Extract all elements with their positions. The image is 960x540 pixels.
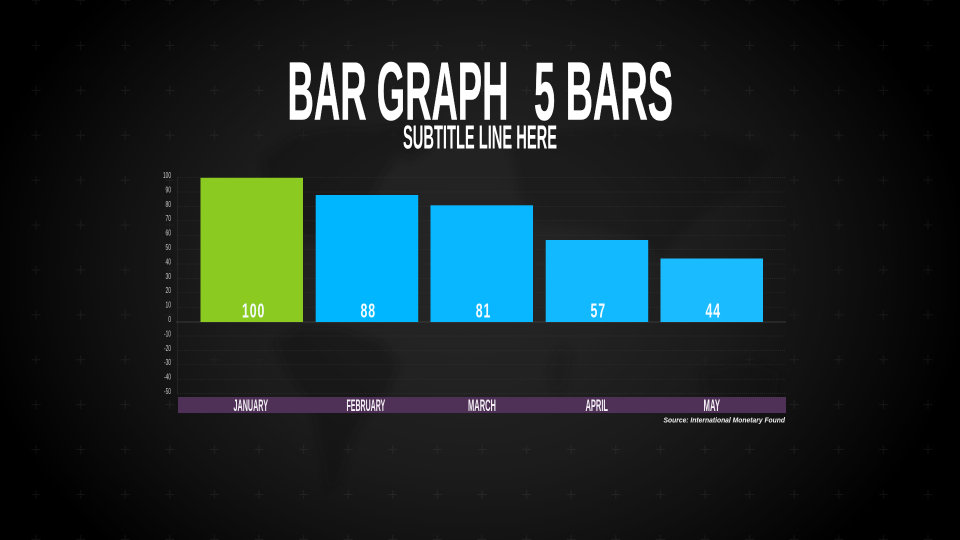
text: 5 BARS [534,44,673,138]
y axis labels: 30 [166,272,171,281]
y axis labels: 0 [168,315,171,324]
category band: MARCH [468,396,496,415]
y axis labels: -30 [164,358,171,367]
y axis labels: 20 [166,286,171,295]
bar: February 88: 88 [360,299,376,322]
gridlines [178,178,786,394]
bar: January 100: 100 [242,299,265,322]
y axis labels: 60 [166,229,171,238]
y axis labels: -10 [164,329,171,338]
y axis labels [163,171,171,396]
bar: April 57: 57 [590,299,606,322]
y axis labels: 100 [163,171,171,180]
bar: May 44 [660,258,763,322]
bar: May 44: 44 [706,299,721,322]
world map silhouette [262,122,780,490]
y axis labels: 90 [166,186,171,194]
bar: March 81 [430,205,533,322]
source note: Source: International Monetary Found [664,417,786,424]
bar: January 100 [200,178,303,322]
text: SUBTITLE LINE HERE [403,118,557,155]
category band: JANUARY [234,396,268,415]
y axis labels: -20 [164,344,171,353]
y axis labels: 50 [166,243,171,252]
category band: APRIL [586,396,608,415]
bar: April 57 [546,240,648,322]
y axis labels: 80 [166,200,171,209]
y axis labels: 40 [166,257,171,266]
bar: March 81: 81 [476,299,491,322]
category band: MAY [704,396,720,415]
bar: February 88 [316,195,418,322]
y axis labels: -40 [164,373,171,382]
y axis labels: 10 [166,301,171,310]
title: BAR GRAPH [288,44,508,138]
y axis labels: 70 [166,214,171,223]
y axis labels: -50 [164,387,171,396]
category band: FEBRUARY [346,396,385,415]
category band [178,396,786,415]
